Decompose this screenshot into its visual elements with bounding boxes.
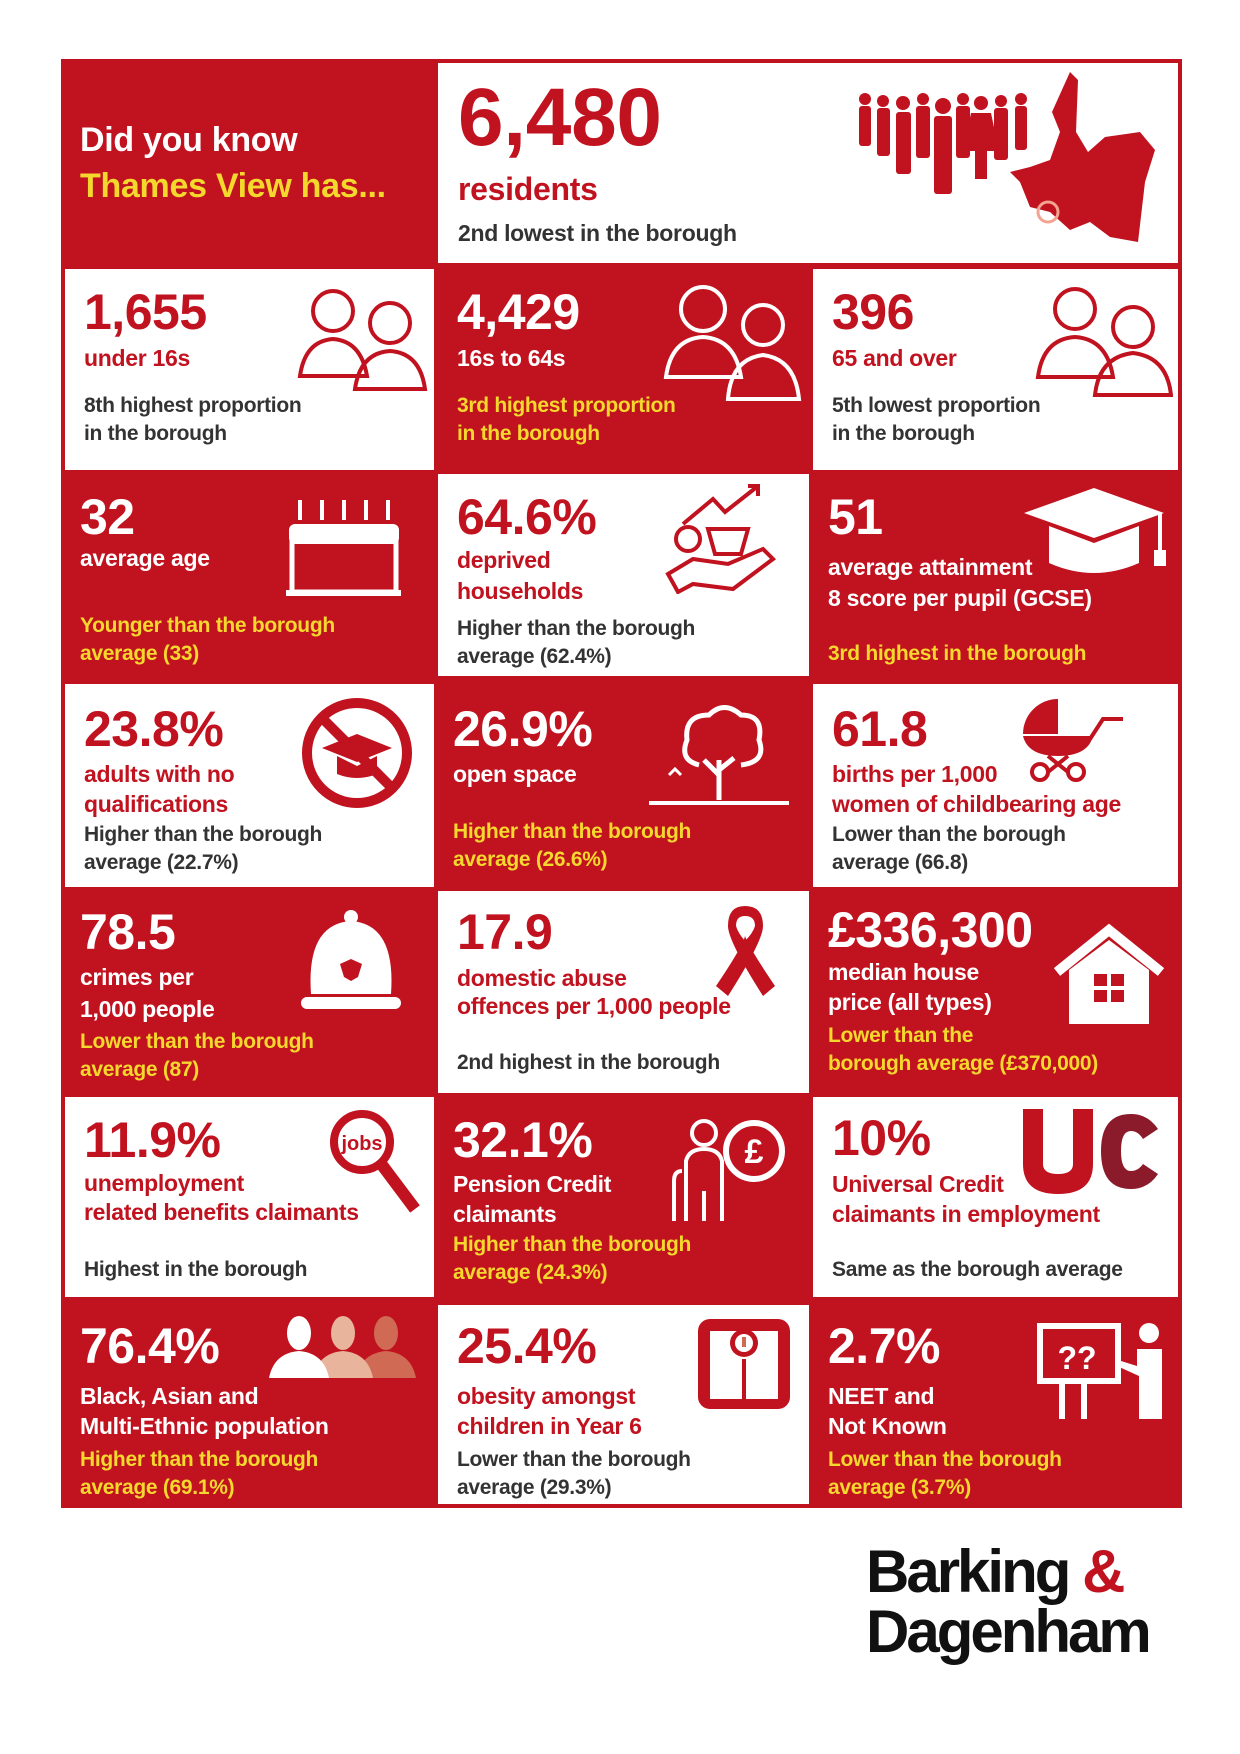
panel: ethnicity bbox=[80, 1316, 416, 1499]
panel: average age: Younger than the borough bbox=[80, 614, 335, 637]
panel: unemployment: 11.9% bbox=[84, 1112, 221, 1168]
panel: pension credit: average (24.3%) bbox=[453, 1261, 607, 1284]
logo: Barking & Dagenham bbox=[866, 1538, 1149, 1665]
panel: 65 and over: 396 bbox=[832, 284, 914, 340]
panel: obesity: children in Year 6 bbox=[457, 1413, 642, 1439]
panel: births: Lower than the borough bbox=[832, 823, 1066, 846]
panel: attainment: 3rd highest in the borough bbox=[828, 642, 1086, 665]
icon: people silhouettes bbox=[269, 1316, 416, 1378]
panel: deprived households: Higher than the borough bbox=[457, 617, 695, 640]
panel: under 16s: 1,655 bbox=[84, 284, 207, 340]
panel: domestic abuse: 17.9 bbox=[457, 904, 552, 960]
panel: births: women of childbearing age bbox=[832, 791, 1121, 817]
panel: pension credit: Pension Credit bbox=[453, 1171, 611, 1197]
panel: NEET: 2.7% bbox=[828, 1318, 940, 1374]
logo: Barking & Dagenham: Barking & bbox=[866, 1538, 1122, 1605]
panel: average age: average age bbox=[80, 545, 210, 571]
panel: house price: median house bbox=[828, 959, 979, 985]
panel: crimes: 78.5 bbox=[80, 904, 175, 960]
panel: births: 61.8 bbox=[832, 701, 927, 757]
panel: deprived households: deprived bbox=[457, 547, 550, 573]
panel: average age: average (33) bbox=[80, 642, 199, 665]
panel: no qualifications: Higher than the borough bbox=[84, 823, 322, 846]
panel: open space: open space bbox=[453, 761, 577, 787]
panel: pension credit: claimants bbox=[453, 1201, 556, 1227]
panel: no qualifications: qualifications bbox=[84, 791, 228, 817]
logo: Barking & Dagenham: Dagenham bbox=[866, 1598, 1149, 1665]
panel: domestic abuse bbox=[438, 891, 809, 1093]
grid of statistics bbox=[61, 59, 1182, 1508]
big number: 6,480 bbox=[458, 72, 662, 163]
panel: NEET: Lower than the borough bbox=[828, 1448, 1062, 1471]
panel: domestic abuse: offences per 1,000 people bbox=[457, 993, 731, 1019]
panel: attainment bbox=[828, 488, 1166, 665]
panel: title bbox=[80, 121, 386, 205]
icon: crowd bbox=[859, 93, 1027, 194]
panel: pension credit: Higher than the borough bbox=[453, 1233, 691, 1256]
panel: unemployment: Highest in the borough bbox=[84, 1258, 307, 1281]
panel: attainment: average attainment bbox=[828, 554, 1032, 580]
panel: domestic abuse: 2nd highest in the borough bbox=[457, 1051, 720, 1074]
panel: universal credit bbox=[813, 1097, 1178, 1297]
panel: open space: average (26.6%) bbox=[453, 848, 607, 871]
panel: under 16s: in the borough bbox=[84, 422, 227, 445]
panel: births bbox=[813, 684, 1178, 887]
title text: Thames View has... bbox=[80, 167, 386, 205]
panel: under 16s: under 16s bbox=[84, 345, 190, 371]
panel: 16s to 64s bbox=[457, 284, 802, 445]
label: residents bbox=[458, 171, 598, 207]
panel: NEET: Not Known bbox=[828, 1413, 947, 1439]
panel: births: average (66.8) bbox=[832, 851, 968, 874]
icon: adults bbox=[664, 285, 802, 401]
panel: pension credit bbox=[453, 1112, 785, 1284]
panel: obesity bbox=[438, 1305, 809, 1504]
panel: NEET bbox=[828, 1318, 1162, 1499]
panel: average age: 32 bbox=[80, 489, 135, 545]
icon: UC bbox=[1023, 1109, 1158, 1194]
panel: ethnicity: average (69.1%) bbox=[80, 1476, 234, 1499]
panel: obesity: obesity amongst bbox=[457, 1383, 635, 1409]
panel: average age bbox=[80, 489, 401, 665]
panel: attainment: 8 score per pupil (GCSE) bbox=[828, 585, 1092, 611]
panel: open space bbox=[453, 701, 789, 871]
panel: universal credit: Universal Credit bbox=[832, 1171, 1004, 1197]
panel: under 16s: 8th highest proportion bbox=[84, 394, 301, 417]
panel: deprived households: households bbox=[457, 578, 583, 604]
panel: unemployment: related benefits claimants bbox=[84, 1199, 359, 1225]
panel: crimes bbox=[80, 904, 401, 1081]
panel: house price: borough average (£370,000) bbox=[828, 1052, 1098, 1075]
panel: attainment: 51 bbox=[828, 489, 883, 545]
panel: obesity: 25.4% bbox=[457, 1318, 596, 1374]
panel: 65 and over: 65 and over bbox=[832, 345, 957, 371]
icon: police helmet bbox=[301, 910, 401, 1009]
panel: ethnicity: Black, Asian and bbox=[80, 1383, 258, 1409]
panel: house price: price (all types) bbox=[828, 989, 992, 1015]
title text bbox=[80, 121, 386, 205]
icon: graduation cap bbox=[1024, 488, 1166, 573]
panel: 65 and over: in the borough bbox=[832, 422, 975, 445]
panel: births: births per 1,000 bbox=[832, 761, 997, 787]
panel: unemployment bbox=[65, 1097, 434, 1297]
panel: universal credit: 10% bbox=[832, 1110, 931, 1166]
panel: NEET: NEET and bbox=[828, 1383, 934, 1409]
icon: no graduation bbox=[302, 698, 412, 808]
title text: Did you know bbox=[80, 121, 297, 159]
panel: NEET: average (3.7%) bbox=[828, 1476, 971, 1499]
icon: jobs magnifier bbox=[330, 1110, 420, 1213]
panel: deprived households: average (62.4%) bbox=[457, 645, 611, 668]
icon: birthday cake bbox=[286, 500, 401, 596]
icon: hand with basket bbox=[665, 484, 776, 594]
panel: no qualifications: 23.8% bbox=[84, 701, 223, 757]
panel: ethnicity: Higher than the borough bbox=[80, 1448, 318, 1471]
panel: crimes: average (87) bbox=[80, 1058, 199, 1081]
panel: domestic abuse: domestic abuse bbox=[457, 965, 627, 991]
panel: unemployment: unemployment bbox=[84, 1170, 244, 1196]
icon: teacher at board: ?? bbox=[1057, 1340, 1097, 1376]
panel: ethnicity: 76.4% bbox=[80, 1318, 219, 1374]
icon: tree bbox=[649, 705, 789, 805]
panel: obesity: Lower than the borough bbox=[457, 1448, 691, 1471]
icon: elderly with pound: £ bbox=[745, 1133, 764, 1171]
panel: crimes: 1,000 people bbox=[80, 996, 214, 1022]
panel: 16s to 64s: 16s to 64s bbox=[457, 345, 565, 371]
icon: jobs magnifier: jobs bbox=[340, 1133, 383, 1155]
panel: ethnicity: Multi-Ethnic population bbox=[80, 1413, 329, 1439]
panel: open space: Higher than the borough bbox=[453, 820, 691, 843]
panel: open space: 26.9% bbox=[453, 701, 592, 757]
icon: children bbox=[298, 289, 428, 391]
panel: no qualifications bbox=[65, 684, 434, 887]
panel: obesity: average (29.3%) bbox=[457, 1476, 611, 1499]
icon: pram bbox=[1023, 699, 1123, 782]
icon: house bbox=[1054, 924, 1164, 1024]
icon: borough map bbox=[1010, 72, 1155, 242]
panel: no qualifications: adults with no bbox=[84, 761, 234, 787]
panel: 16s to 64s: 4,429 bbox=[457, 284, 580, 340]
icon: elderly bbox=[1036, 287, 1173, 397]
panel: deprived households: 64.6% bbox=[457, 489, 596, 545]
panel: 65 and over bbox=[813, 269, 1178, 470]
panel: under 16s bbox=[65, 269, 434, 470]
panel: crimes: crimes per bbox=[80, 964, 193, 990]
panel: crimes: Lower than the borough bbox=[80, 1030, 314, 1053]
icon: ribbon bbox=[716, 906, 775, 996]
panel: 16s to 64s: 3rd highest proportion bbox=[457, 394, 676, 417]
panel: house price bbox=[828, 902, 1164, 1075]
panel: 16s to 64s: in the borough bbox=[457, 422, 600, 445]
panel: no qualifications: average (22.7%) bbox=[84, 851, 238, 874]
panel: residents bbox=[438, 63, 1178, 263]
panel: deprived households bbox=[438, 474, 809, 676]
panel: universal credit: claimants in employment bbox=[832, 1201, 1100, 1227]
panel: pension credit: 32.1% bbox=[453, 1112, 592, 1168]
panel: 65 and over: 5th lowest proportion bbox=[832, 394, 1040, 417]
icon: scales bbox=[698, 1319, 790, 1409]
note: 2nd lowest in the borough bbox=[458, 220, 737, 246]
icon: teacher at board bbox=[1037, 1323, 1162, 1419]
icon: elderly with pound bbox=[672, 1119, 785, 1221]
panel: house price: Lower than the bbox=[828, 1024, 973, 1047]
panel: universal credit: Same as the borough average bbox=[832, 1258, 1123, 1281]
panel: house price: £336,300 bbox=[828, 902, 1033, 958]
